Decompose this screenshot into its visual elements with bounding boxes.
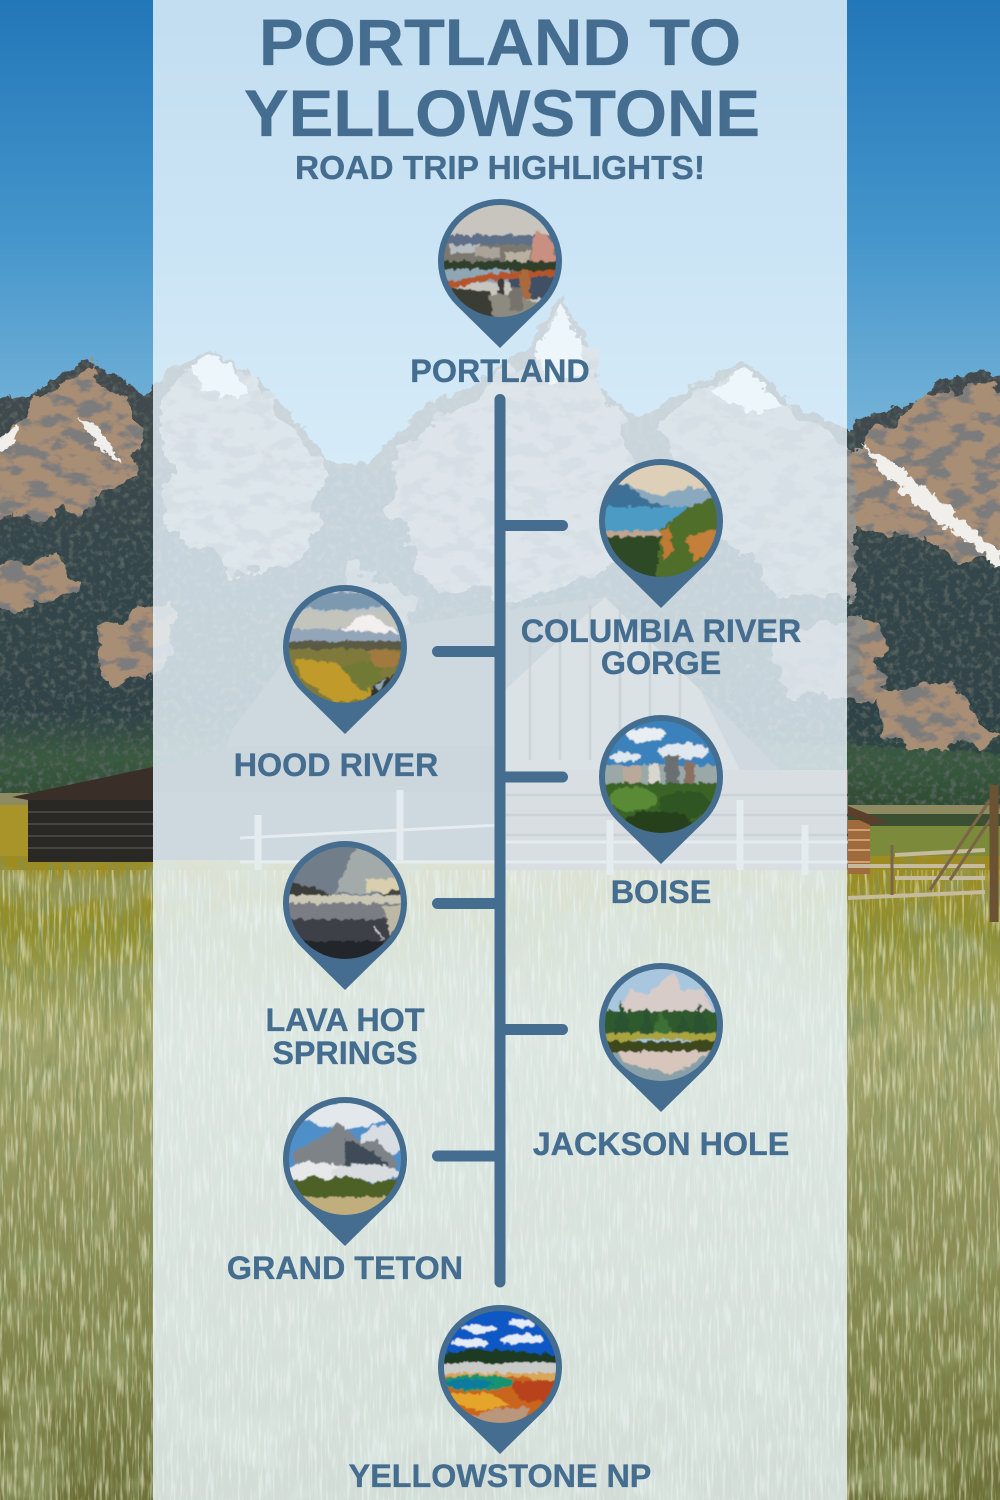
label: Portland: PORTLAND [410,353,590,389]
title: PORTLAND TO [259,5,741,79]
label: Columbia River Gorge [521,613,801,681]
timeline spine and branches [438,400,562,1282]
pin: Portland [438,199,562,348]
photo: Grand Teton in clouds [289,1103,401,1215]
label: Lava Hot Springs [265,1002,425,1071]
tree line [0,712,1000,828]
photo: Portland city and bridge [444,205,556,317]
translucent central panel [153,0,847,1500]
barn and wings seen behind the panel [153,597,848,875]
pin: Boise [599,715,723,864]
photo: Grand Prismatic Spring [444,1311,556,1423]
label: Columbia River Gorge: COLUMBIA RIVER [521,613,801,649]
sky [0,0,1000,520]
pin: Jackson Hole [599,963,723,1112]
title: YELLOWSTONE [244,76,760,150]
pin: Yellowstone NP [438,1305,562,1454]
right cabin and fence [848,785,1000,922]
label: Lava Hot Springs: SPRINGS [272,1035,418,1071]
photo: river gorge and cliff [605,465,717,577]
photo: Tetons reflected in a pond [605,969,717,1081]
label: Lava Hot Springs: LAVA HOT [265,1002,425,1038]
pin: Lava Hot Springs [283,841,407,990]
meadow grass [0,805,1000,1500]
pin: Hood River [283,585,407,734]
pin: Grand Teton [283,1097,407,1246]
mountain range [0,296,1000,820]
title [244,5,760,150]
label: Hood River: HOOD RIVER [234,747,438,783]
pin: Columbia River Gorge [599,459,723,608]
sunlit rock faces [0,310,1000,755]
left log cabin [12,767,153,862]
photo: Boise skyline and trees [605,721,717,833]
photo: misty reflective water [289,847,401,959]
subtitle: ROAD TRIP HIGHLIGHTS! [295,149,705,186]
photo: Mt Hood over autumn trees [289,591,401,703]
label: Jackson Hole: JACKSON HOLE [533,1126,789,1162]
label: Grand Teton: GRAND TETON [227,1250,463,1286]
snow on peaks [0,304,1000,566]
label: Yellowstone NP: YELLOWSTONE NP [349,1458,651,1494]
label: Columbia River Gorge: GORGE [601,645,721,681]
label: Boise: BOISE [611,874,711,910]
